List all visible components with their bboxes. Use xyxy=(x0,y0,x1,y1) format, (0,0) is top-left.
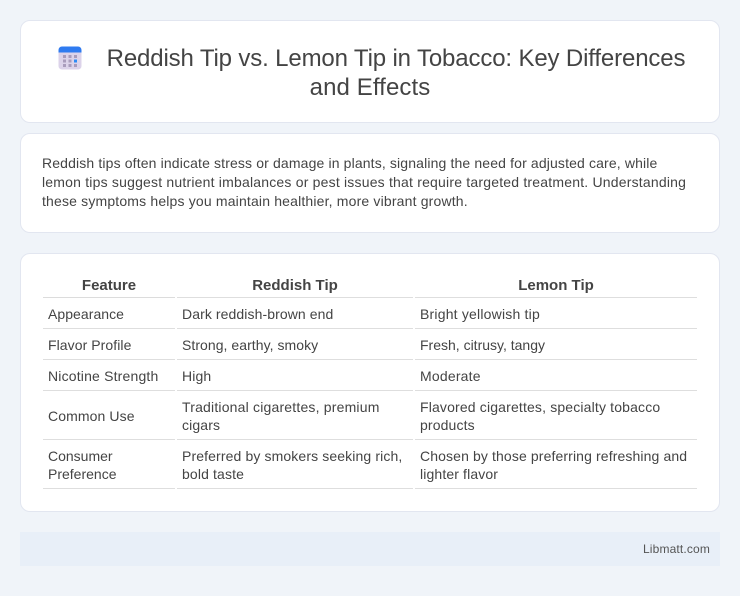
row: flavor profile: Flavor Profile xyxy=(48,337,131,353)
intro text: these symptoms helps you maintain healthier, more vibrant growth. xyxy=(42,193,468,209)
row: flavor profile xyxy=(48,337,545,353)
row: nicotine strength: Nicotine Strength xyxy=(48,368,158,384)
panel: title card xyxy=(20,20,720,123)
row: common use xyxy=(48,399,660,433)
row: common use: Flavored cigarettes, specialty tobacco xyxy=(420,399,660,415)
icon: calendar xyxy=(58,46,82,70)
row: appearance: Dark reddish-brown end xyxy=(182,306,333,322)
title: and Effects xyxy=(310,74,430,101)
row: common use: cigars xyxy=(182,417,220,433)
row: consumer preference xyxy=(48,448,687,482)
column headers xyxy=(82,277,594,294)
title xyxy=(107,45,685,101)
column headers: Lemon Tip xyxy=(518,277,594,294)
row: flavor profile: Strong, earthy, smoky xyxy=(182,337,318,353)
row: consumer preference: bold taste xyxy=(182,466,244,482)
row: appearance: Bright yellowish tip xyxy=(420,306,540,322)
row: nicotine strength xyxy=(48,368,481,384)
panel: intro card xyxy=(20,133,720,233)
row: nicotine strength: Moderate xyxy=(420,368,481,384)
intro text: lemon tips suggest nutrient imbalances or pest issues that require targeted treatment. Understanding xyxy=(42,174,686,190)
row: appearance: Appearance xyxy=(48,306,124,322)
row: common use: Common Use xyxy=(48,408,135,424)
row: consumer preference: Preferred by smokers seeking rich, xyxy=(182,448,402,464)
row: common use: Traditional cigarettes, premium xyxy=(182,399,380,415)
row: consumer preference: Consumer xyxy=(48,448,113,464)
footer bar xyxy=(20,532,720,566)
intro text xyxy=(42,155,686,209)
panel: comparison table card xyxy=(20,253,720,512)
column headers: Reddish Tip xyxy=(252,277,338,294)
row: consumer preference: Preference xyxy=(48,466,116,482)
row: consumer preference: Chosen by those preferring refreshing and xyxy=(420,448,687,464)
row: common use: products xyxy=(420,417,475,433)
footer credit: Libmatt.com xyxy=(643,542,710,556)
row: consumer preference: lighter flavor xyxy=(420,466,498,482)
row: flavor profile: Fresh, citrusy, tangy xyxy=(420,337,545,353)
title: Reddish Tip vs. Lemon Tip in Tobacco: Key Differences xyxy=(107,45,685,72)
row: nicotine strength: High xyxy=(182,368,211,384)
intro text: Reddish tips often indicate stress or damage in plants, signaling the need for adjusted care, while xyxy=(42,155,657,171)
comparison table xyxy=(43,277,697,489)
column headers: Feature xyxy=(82,277,136,294)
row: appearance xyxy=(48,306,540,322)
